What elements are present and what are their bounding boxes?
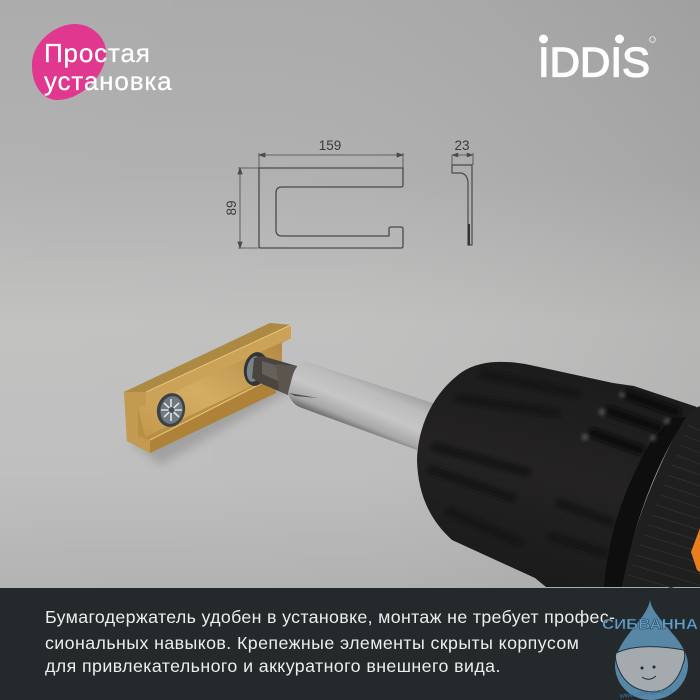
description text: сиональных навыков. Крепежные элементы скрыты корпусом: [45, 633, 579, 653]
dimension line: width: [259, 153, 403, 168]
bracket shadow: [130, 372, 300, 465]
water drop: [615, 600, 688, 700]
upper flange top face: [124, 323, 291, 392]
metal bit holder: [288, 362, 436, 450]
dark groove between ring and chuck: [604, 417, 686, 587]
rear collar ridges: [593, 395, 676, 450]
footer band: [0, 588, 700, 700]
brand name: СИБВАННА: [602, 616, 698, 633]
tub face: [640, 666, 656, 679]
brass mounting bracket: [124, 323, 291, 453]
heading: Простая: [44, 38, 151, 68]
drill body: [417, 362, 700, 596]
channel back: [138, 343, 282, 437]
description text: для привлекательного и аккуратного внешнего вида.: [45, 656, 501, 676]
upper flange front face: [146, 325, 291, 405]
screw lower: [154, 390, 188, 430]
screwdriver bit tip: [252, 356, 297, 395]
description text: [45, 607, 615, 676]
dimension line: height: [238, 168, 259, 248]
dimension drawing: side view: [452, 153, 473, 245]
knurled ring: [622, 406, 700, 587]
orange grip accent: [691, 528, 700, 572]
heading: установка: [44, 66, 172, 96]
brand logo: iddis: IDDIS: [538, 38, 650, 86]
description text: Бумагодержатель удобен в установке, монтаж не требует профес-: [45, 607, 615, 627]
chuck: [417, 362, 697, 587]
chuck ridges: [432, 374, 610, 553]
screw upper: [241, 350, 271, 388]
watermark: sibvanna: [602, 600, 698, 700]
dimension label: 89: 89: [224, 200, 239, 216]
bathtub: [616, 647, 685, 692]
holder outline: [259, 168, 403, 248]
heading: [44, 38, 172, 96]
dimension label: 23: 23: [454, 138, 470, 153]
lower flange: [150, 376, 276, 453]
dimension drawing: front view: [238, 153, 403, 248]
upper flange edge: [146, 325, 291, 392]
dimension label: 159: 159: [319, 138, 341, 153]
url: www.sibvanna.ru: [618, 687, 673, 700]
badge: pink blob: [32, 24, 106, 100]
rib highlights: [582, 392, 670, 441]
